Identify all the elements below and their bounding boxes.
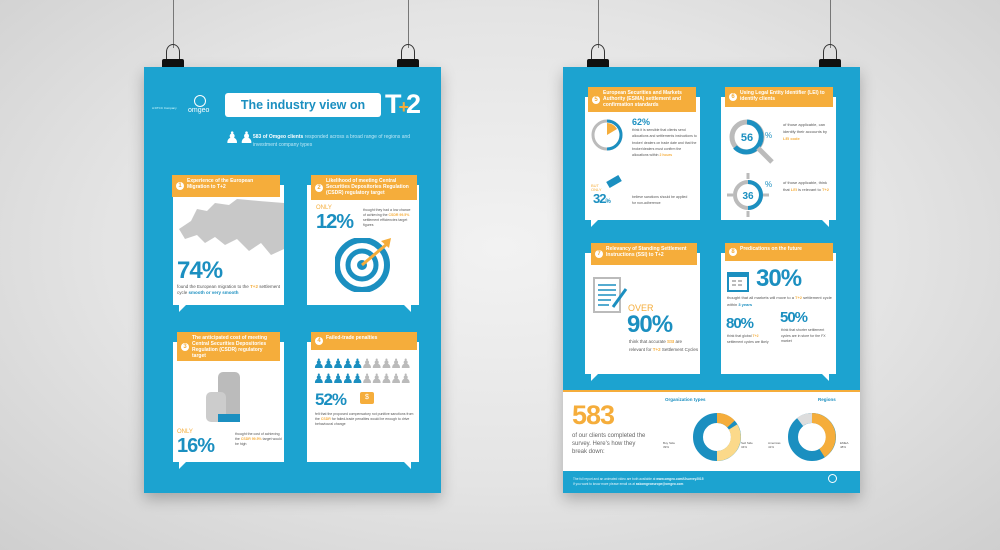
logo: omgeo [188,107,209,114]
donut: regions: Regions [818,397,836,402]
panel 8: 8 [731,249,735,255]
donut: organization types: Buy Side [663,441,675,445]
donut: regions: 41% [768,445,774,449]
white band summary: 583 [572,400,614,430]
panel 7: Relevancy of Standing Settlement Instructions (SSI) to T+2 [606,246,687,258]
calendar [727,272,749,292]
logo: A DTCC Company [152,106,177,110]
document icon [593,277,628,313]
panel 5: European Securities and Markets Authority (ESMA) settlement and confirmation standards [603,90,682,108]
panel 2: 2 [317,184,321,190]
donut: organization types [663,397,753,461]
footer: The full report and an animated video are both available at www.omgeo.com/t2survey2015 [573,477,703,481]
panel 8: Predications on the future [740,246,802,252]
target [335,238,391,292]
donut: organization types: 34% [741,445,747,449]
panel 8: think that shorter settlement cycles are in store for the FX market [781,328,826,343]
magnifier [730,120,774,164]
clock [592,120,622,150]
panel 7: 90% [627,311,672,338]
panel 6: of those applicable, think that LEI is relevant to T+2 [783,180,829,192]
map [179,199,284,255]
panel 2: Likelihood of meeting Central Securities Depositories Regulation (CSDR) regulatory target [326,178,409,196]
panel 8: thought that all markets will move to a T+2 settlement cycle within 3 years [727,295,832,307]
crosshair: 36 [742,191,754,202]
panel 6: 6 [731,94,735,100]
panel 3 [173,332,284,469]
logo [152,95,210,114]
panel 1: 74% [177,257,222,284]
donut: organization types: Sell Side [741,441,753,445]
donut: organization types: 39% [663,445,669,449]
panel 1: found the European migration to the T+2 settlement cycle smooth or very smooth [177,284,280,295]
subtitle: ♟♟ [225,130,254,147]
footer [573,474,837,486]
panel 8: 80% [726,315,753,332]
panel 7 [585,243,700,381]
title [225,93,381,117]
panel 3: 3 [183,344,187,350]
crosshair [727,173,769,217]
subtitle: 583 of Omgeo clients responded across a broad range of regions and investment company types [253,134,410,148]
panel 3: The anticipated cost of meeting Central Securities Depositories Regulation (CSDR) regulatory target [192,335,267,359]
panel 1 [172,175,284,312]
panel 8: 50% [780,309,807,326]
panel 4: $ [365,394,369,401]
white band summary: of our clients completed the survey. Here's how they break down: [572,433,645,455]
panel 7: think that accurate SSI are relevant for T+2 Settlement Cycles [629,339,698,352]
panel 4: Failed-trade penalties [326,335,377,341]
strings and clips [162,0,841,67]
gavel: ONLY [591,187,602,192]
panel 5 [585,87,700,227]
panel 2: 12% [316,211,353,233]
subtitle [225,130,410,148]
panel 4 [307,332,419,469]
panel 5: 5 [594,96,598,102]
gavel: BUT [591,183,599,188]
donut: regions: 48% [840,445,846,449]
footer: If you want to know more please email us at askomgeoeurope@omgeo.com [573,482,683,486]
panel 6: % [765,180,772,189]
panel 1: 1 [178,183,182,189]
panel 1: Experience of the European Migration to T+2 [187,178,253,190]
gavel [591,175,622,206]
panel 2: thought they had a low chance of achieving the CSDR 99.5% settlement efficiencies target figures [363,208,410,227]
people icons: ♟♟♟♟♟♟♟♟♟♟ [313,356,410,371]
panel 5: believe sanctions should be applied for non-adherence [632,195,687,205]
panel 6 [721,87,836,227]
panel 8: 30% [756,265,801,292]
panel 6: % [765,131,772,140]
panel 6: of those applicable, can identify their accounts by LEI code [783,122,827,141]
panel 8: think that global T+2 settlement cycles are likely [727,334,769,344]
donut: regions: Americas [768,441,781,445]
donut: regions: EMEA [840,441,849,445]
poster: right [563,67,860,493]
coins [206,372,240,422]
panel 4: 4 [317,338,321,344]
panel 2 [307,175,419,312]
panel 3: ONLY [177,429,193,435]
title T+2: T+2 [385,89,418,119]
white band summary [563,390,860,471]
title: The industry view on [241,98,365,112]
magnifier: 56 [741,132,753,144]
panel 3: 16% [177,435,214,457]
people icons: ♟♟♟♟♟♟♟♟♟♟ [313,371,410,386]
panel 4: felt that the proposed compensatory not punitive sanctions from the CSDR for failed-trade penalties would be enough to drive behavioural change [315,412,413,426]
panel 7: 7 [597,251,601,257]
gavel: 32% [593,191,610,206]
panel 5: think it is sensible that clients send allocations and settlements instructions to broker/ dealers on trade date and that the broker/dealers must confirm the allocations within 2 hours [632,128,697,157]
panel 8 [721,243,836,381]
donut: organization types: Organization types [665,397,706,402]
panel 5: 62% [632,117,650,127]
poster: left [144,67,441,493]
panel 2: ONLY [316,205,332,211]
panel 7: OVER [628,303,654,313]
panel 6: Using Legal Entity Identifier (LEI) to identify clients [740,90,825,102]
people icons [313,356,410,386]
donut: regions [768,397,849,461]
panel 3: thought the cost of achieving the CSDR 99.5% target would be high [235,432,282,446]
panel 4: 52% [315,390,346,409]
